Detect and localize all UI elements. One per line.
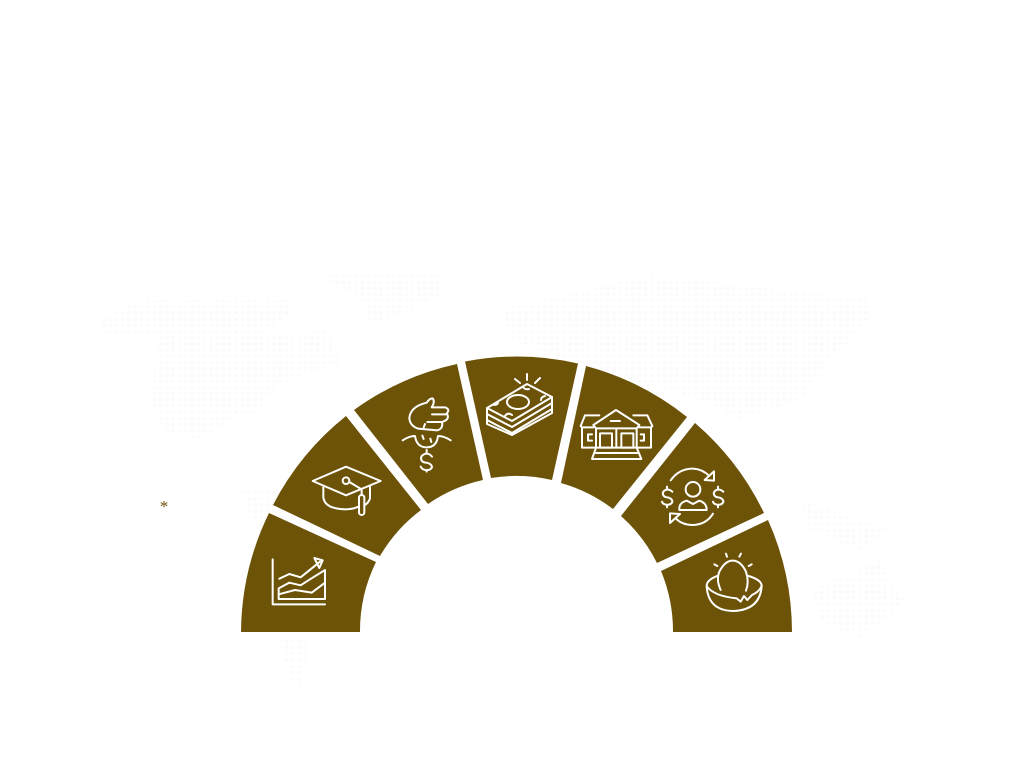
arch diagram [241, 357, 792, 632]
segment: income exchange [621, 423, 764, 563]
segment: nest egg [661, 520, 792, 632]
segment: growth chart [241, 513, 376, 632]
icon: stack of money [487, 374, 552, 435]
icon: graduation cap [313, 467, 381, 515]
segment: cash [465, 357, 578, 480]
icon: rising chart [273, 558, 325, 604]
icon: bank building [581, 410, 652, 459]
segment: education [273, 416, 421, 556]
segment: debt / handout [354, 364, 483, 504]
asterisk note marker: * [160, 497, 168, 516]
icon: hand over head with dollar [403, 398, 451, 472]
background: faint dotted world map [100, 270, 905, 690]
icon: person with circulating dollars [662, 469, 723, 525]
icon: egg in nest [707, 554, 762, 611]
segment: bank [561, 366, 687, 509]
